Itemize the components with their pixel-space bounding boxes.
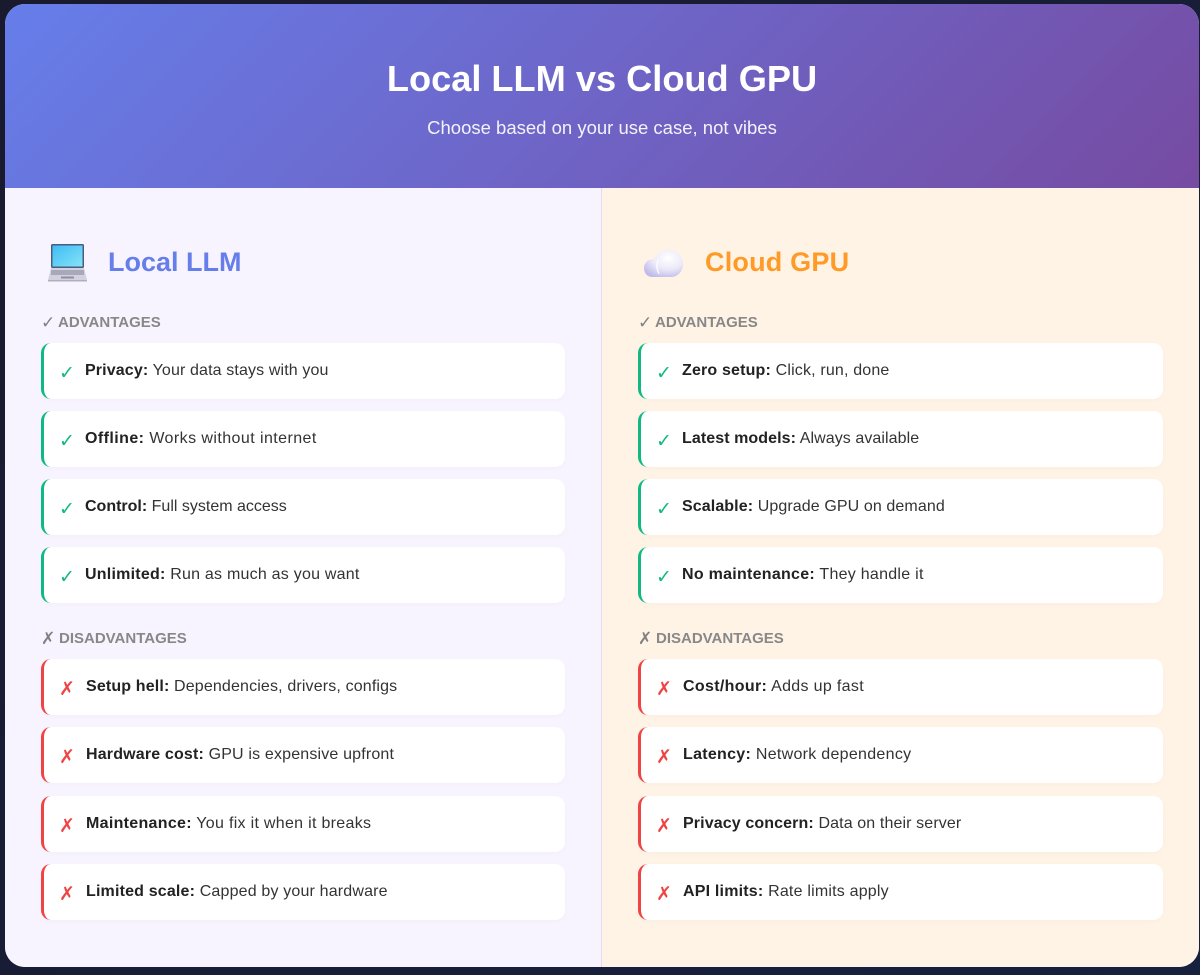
heading text: Cloud GPU <box>705 247 849 277</box>
item: ✗ <box>656 883 672 905</box>
heading text: Local LLM <box>108 247 242 277</box>
section label: advantages: ✓ <box>41 313 55 333</box>
item: ✗ <box>59 746 75 768</box>
item <box>41 411 565 467</box>
item <box>638 727 1163 783</box>
item: ✗ <box>656 746 672 768</box>
header banner <box>5 4 1199 188</box>
panel heading: local LLM <box>48 244 242 282</box>
item: ✓ <box>59 430 75 452</box>
item <box>638 479 1163 535</box>
item: Latency: Network dependency <box>683 746 911 763</box>
item: ✓ <box>59 566 75 588</box>
item: ✓ <box>59 498 75 520</box>
section label: disadvantages: DISADVANTAGES <box>59 630 187 647</box>
item: ✓ <box>59 362 75 384</box>
item <box>41 479 565 535</box>
item <box>41 796 565 852</box>
item: API limits: Rate limits apply <box>683 883 889 900</box>
item: ✗ <box>59 883 75 905</box>
item: Latest models: Always available <box>682 430 919 447</box>
item: Scalable: Upgrade GPU on demand <box>682 498 945 515</box>
item <box>41 659 565 715</box>
subtitle: Choose based on your use case, not vibes <box>427 117 777 138</box>
section label: disadvantages: ✗ <box>41 629 55 649</box>
item: Maintenance: You fix it when it breaks <box>86 815 371 832</box>
item <box>638 796 1163 852</box>
section label: advantages: ADVANTAGES <box>655 314 758 331</box>
icon: laptop <box>48 244 87 282</box>
item <box>638 411 1163 467</box>
item: Unlimited: Run as much as you want <box>85 566 360 583</box>
item <box>638 864 1163 920</box>
section label: advantages: ADVANTAGES <box>58 314 161 331</box>
item: Privacy: Your data stays with you <box>85 362 329 379</box>
item: ✓ <box>656 362 672 384</box>
item: ✗ <box>59 678 75 700</box>
section label: disadvantages: DISADVANTAGES <box>656 630 784 647</box>
item: Zero setup: Click, run, done <box>682 362 890 379</box>
panel: local LLM <box>5 188 602 967</box>
item: ✓ <box>656 430 672 452</box>
item: ✗ <box>59 815 75 837</box>
item: ✓ <box>656 566 672 588</box>
item: ✗ <box>656 815 672 837</box>
item: ✗ <box>656 678 672 700</box>
icon: cloud <box>644 250 683 277</box>
item <box>41 343 565 399</box>
section label: advantages: ✓ <box>638 313 652 333</box>
item: Cost/hour: Adds up fast <box>683 678 864 695</box>
item: ✓ <box>656 498 672 520</box>
item <box>638 547 1163 603</box>
item <box>41 727 565 783</box>
item <box>41 547 565 603</box>
item: Limited scale: Capped by your hardware <box>86 883 388 900</box>
panel heading: cloud GPU <box>644 247 849 277</box>
item: Control: Full system access <box>85 498 287 515</box>
item <box>638 659 1163 715</box>
item: Privacy concern: Data on their server <box>683 815 961 832</box>
section label: disadvantages: ✗ <box>638 629 652 649</box>
item <box>41 864 565 920</box>
item <box>638 343 1163 399</box>
item: No maintenance: They handle it <box>682 566 924 583</box>
item: Setup hell: Dependencies, drivers, configs <box>86 678 397 695</box>
panel: cloud GPU <box>602 188 1199 967</box>
title: Local LLM vs Cloud GPU <box>387 58 817 99</box>
item: Offline: Works without internet <box>85 430 317 447</box>
item: Hardware cost: GPU is expensive upfront <box>86 746 394 763</box>
